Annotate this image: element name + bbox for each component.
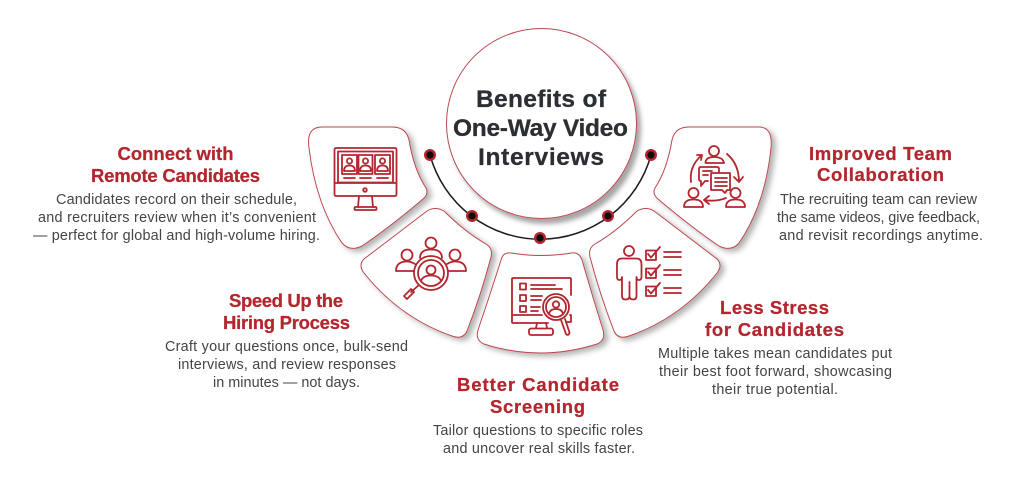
connector arc with dots xyxy=(424,149,657,244)
text: less stress for candidates: their true potential. xyxy=(712,382,838,398)
text: connect with remote candidates: Candidates record on their schedule, xyxy=(56,192,297,208)
text: better candidate screening: Screening xyxy=(490,396,585,417)
text: speed up the hiring process: Hiring Process xyxy=(223,312,350,333)
text: less stress for candidates xyxy=(658,297,892,398)
text: better candidate screening: Better Candidate xyxy=(457,374,619,395)
title circle xyxy=(446,28,636,218)
title xyxy=(453,86,628,171)
title: Interviews xyxy=(478,144,604,171)
title: Benefits of xyxy=(476,86,607,113)
text: improved team collaboration xyxy=(777,143,983,244)
text: less stress for candidates: for Candidates xyxy=(705,319,844,340)
text: speed up the hiring process xyxy=(165,290,408,391)
text: speed up the hiring process: Speed Up the xyxy=(229,290,343,311)
text: improved team collaboration: The recruiting team can review xyxy=(780,192,978,208)
icon: candidates under magnifier xyxy=(396,238,466,299)
icon: team discussion cycle xyxy=(684,146,745,207)
text: speed up the hiring process: in minutes — not days. xyxy=(213,375,360,391)
panel: hiring process xyxy=(361,208,491,337)
text: better candidate screening: Tailor questions to specific roles xyxy=(433,423,643,439)
panel: candidate screening xyxy=(477,253,604,353)
icon: person with checklist xyxy=(617,246,681,300)
panel: team collaboration xyxy=(654,127,771,248)
text: improved team collaboration: Improved Team xyxy=(809,143,952,164)
icon: monitor with video candidates xyxy=(334,148,396,210)
text: improved team collaboration: and revisit recordings anytime. xyxy=(779,228,983,244)
text: connect with remote candidates: Remote Candidates xyxy=(91,165,260,186)
text: better candidate screening xyxy=(433,374,643,457)
panel: remote candidates xyxy=(309,127,427,248)
text: improved team collaboration: the same videos, give feedback, xyxy=(777,210,980,226)
text: improved team collaboration: Collaboration xyxy=(817,164,944,185)
text: better candidate screening: and uncover real skills faster. xyxy=(443,441,635,457)
panel: less stress xyxy=(590,208,720,337)
text: less stress for candidates: their best foot forward, showcasing xyxy=(659,364,892,380)
text: speed up the hiring process: interviews, and review responses xyxy=(178,357,396,373)
text: less stress for candidates: Multiple takes mean candidates put xyxy=(658,346,892,362)
text: connect with remote candidates xyxy=(33,143,320,244)
title: One-Way Video xyxy=(453,115,628,142)
text: connect with remote candidates: Connect with xyxy=(118,143,234,164)
text: connect with remote candidates: and recruiters review when it’s convenient xyxy=(38,210,316,226)
icon: monitor with magnifier xyxy=(512,278,571,335)
text: less stress for candidates: Less Stress xyxy=(720,297,829,318)
text: speed up the hiring process: Craft your questions once, bulk-send xyxy=(165,339,408,355)
text: connect with remote candidates: — perfect for global and high-volume hiring. xyxy=(33,228,320,244)
